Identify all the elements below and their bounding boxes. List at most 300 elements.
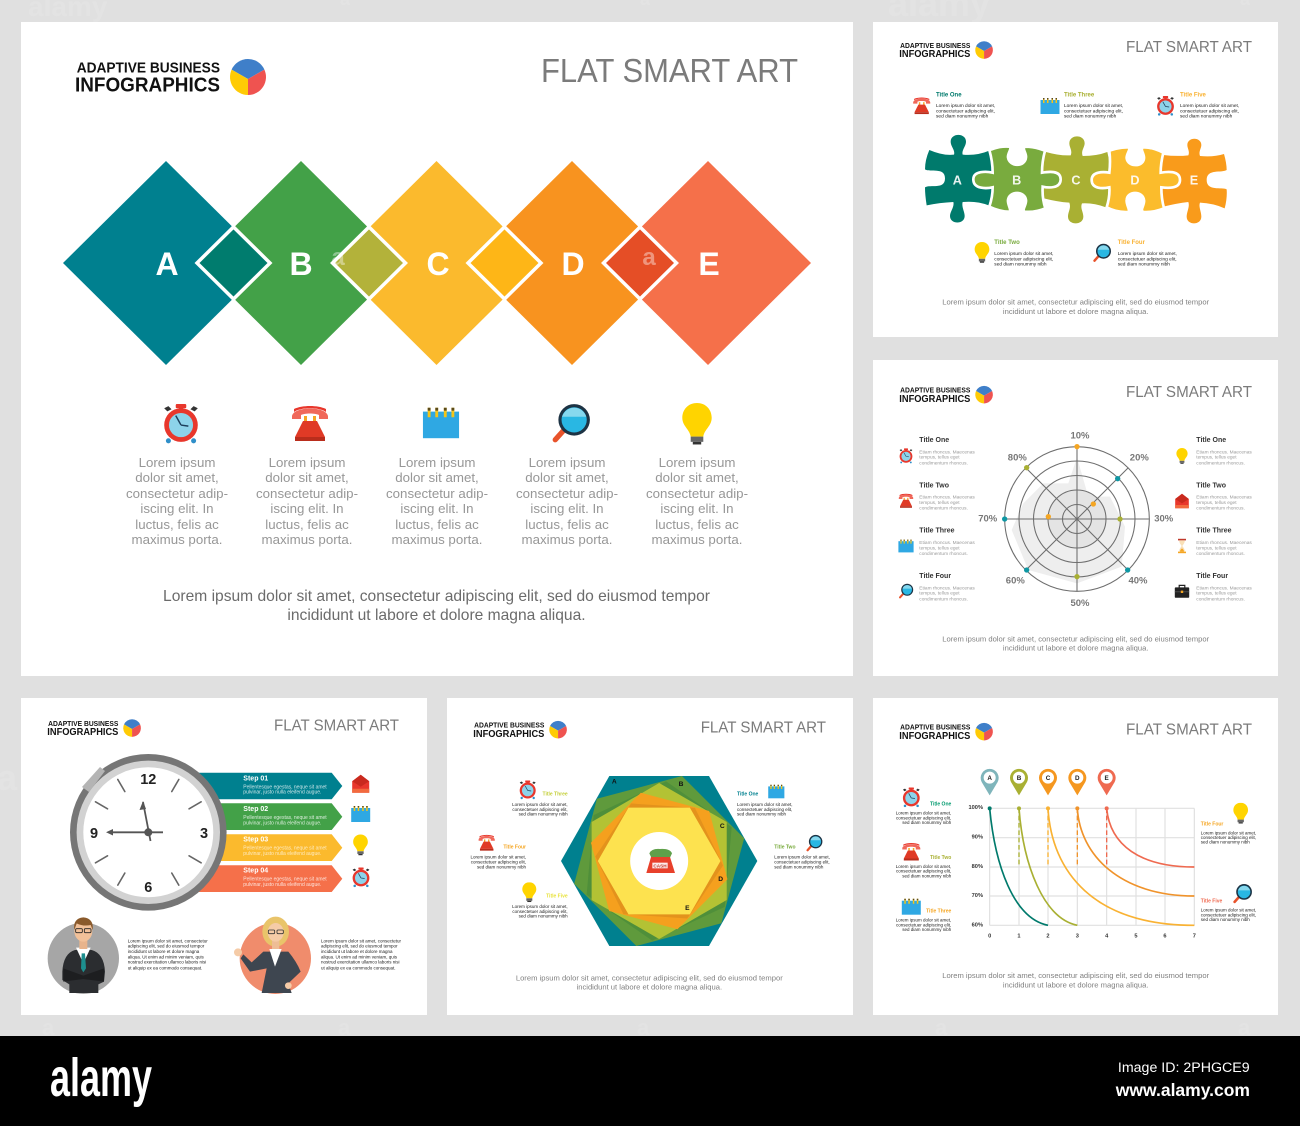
text: title four: consectetuer adipiscing elit,: [471, 859, 526, 864]
nested hexagon diagram: A: [612, 779, 617, 786]
title: FLAT SMART ART: [1126, 384, 1252, 401]
list: left title four: Etiam rhoncus. Maecenas: [919, 585, 975, 591]
list: right title two: [1196, 482, 1252, 512]
column text 1: Lorem ipsum: [139, 455, 215, 470]
radar percent labels: 40%: [1128, 575, 1148, 586]
column text 2: dolor sit amet,: [265, 470, 349, 485]
step 01 arrow: [196, 773, 342, 799]
text: title five: [1180, 92, 1239, 120]
line chart: E: [1105, 775, 1109, 782]
stock photo footer bar: alamy: [50, 1048, 152, 1108]
panel: line chart: [873, 698, 1278, 1015]
line chart: 2: [1046, 933, 1050, 939]
puzzle chain: A: [953, 173, 962, 187]
logo: ADAPTIVE BUSINESS: [48, 719, 119, 728]
line chart: 4: [1105, 933, 1109, 939]
panel: diamonds (main): [21, 22, 853, 676]
text: title three: sed diam nonummy nibh: [519, 812, 568, 817]
text: title three: [896, 909, 952, 932]
list: right title four: [1196, 573, 1252, 602]
nested hexagon diagram: B: [679, 781, 684, 788]
text: man description: aliqua. Ut enim ad minim veniam, quis: [128, 955, 204, 960]
text: title one: consectetuer adipiscing elit,: [936, 108, 995, 114]
diamond row A to E: C: [426, 246, 450, 282]
text: title five: Title Five: [1180, 92, 1207, 98]
text: woman description: incididunt ut labore et dolore magna: [321, 949, 393, 954]
list: right title three: Etiam rhoncus. Maecenas: [1196, 540, 1252, 546]
text: title three: consectetuer adipiscing elit,: [896, 922, 951, 927]
line chart: 90%: [972, 835, 983, 841]
step 02 arrow: pulvinar, justo nulla eleifend augue.: [243, 820, 321, 826]
text: title two: consectetuer adipiscing elit,: [774, 859, 830, 864]
step 03 arrow: Pellentesque egestas, neque sit amet: [243, 846, 327, 852]
step 03 arrow: pulvinar, justo nulla eleifend augue.: [243, 851, 321, 857]
icon: magnifier: [555, 404, 590, 440]
line chart: 1: [1017, 933, 1021, 939]
list: left title two: Etiam rhoncus. Maecenas: [919, 495, 975, 501]
list: left title one: Title One: [919, 437, 949, 444]
column text 1: dolor sit amet,: [135, 470, 219, 485]
list: right title two: condimentum rhoncus.: [1196, 506, 1245, 512]
line chart: 0: [988, 933, 991, 939]
list: right title three: condimentum rhoncus.: [1196, 551, 1245, 557]
icon: light bulb: [682, 403, 712, 444]
line chart: D: [1075, 775, 1080, 782]
logo: ADAPTIVE BUSINESS: [474, 720, 545, 729]
column text 1: luctus, felis ac: [135, 517, 219, 532]
icon: telephone: [479, 835, 495, 851]
list: right title one: condimentum rhoncus.: [1196, 460, 1245, 466]
text: title three: consectetuer adipiscing elit,: [512, 807, 568, 812]
step 02 arrow: Pellentesque egestas, neque sit amet: [243, 815, 327, 821]
nested hexagon diagram: C: [720, 823, 725, 830]
line chart: 100%: [969, 805, 983, 811]
icon: alarm clock: [903, 788, 920, 807]
column text 3: maximus porta.: [392, 532, 482, 547]
text: man description: Lorem ipsum dolor sit amet, consectetur: [128, 938, 208, 943]
icon: calendar: [902, 899, 921, 915]
panel: radar chart: [873, 360, 1278, 676]
list: right title two: tempus, tellus eget: [1196, 500, 1237, 506]
text: title one: [737, 792, 793, 817]
logo: [75, 59, 266, 97]
text: title one: [896, 802, 952, 825]
diamond row A to E: a: [642, 244, 656, 271]
title: FLAT SMART ART: [1126, 39, 1252, 56]
column text 5: maximus porta.: [652, 532, 742, 547]
text: man description: adipiscing elit, sed do eiusmod tempor: [128, 944, 205, 949]
column text 5: dolor sit amet,: [655, 470, 739, 485]
text: woman description: Lorem ipsum dolor sit amet, consectetur: [321, 938, 402, 943]
title: FLAT SMART ART: [541, 52, 798, 89]
list: right title one: [1196, 437, 1252, 466]
text: title five: [1201, 898, 1256, 922]
icon: envelope: [1175, 494, 1189, 508]
list: left title one: Etiam rhoncus. Maecenas: [919, 449, 975, 455]
text: title five: sed diam nonummy nibh: [1180, 114, 1233, 120]
diamond row A to E: [63, 161, 811, 365]
logo: INFOGRAPHICS: [47, 727, 119, 738]
nested hexagon diagram: CASH: [653, 863, 667, 868]
text: title three: Title Three: [1064, 92, 1095, 98]
text: title three: sed diam nonummy nibh: [1064, 114, 1117, 120]
text: title four: [470, 844, 526, 869]
diamond row A to E: a: [331, 244, 345, 271]
panel: clock and steps: [21, 698, 427, 1015]
text: title three: Lorem ipsum dolor sit amet,: [512, 802, 568, 807]
line chart: 70%: [972, 893, 983, 899]
column text 5: iscing elit. In: [660, 501, 734, 516]
footer text: incididunt ut labore et dolore magna aliqua.: [1003, 307, 1148, 316]
text: title two: Title Two: [994, 240, 1020, 246]
icon: alarm clock: [900, 448, 912, 463]
title: FLAT SMART ART: [701, 720, 826, 737]
icon: envelope: [352, 775, 369, 793]
text: title four: Lorem ipsum dolor sit amet,: [1118, 251, 1177, 257]
wall clock: 9: [90, 826, 98, 842]
column text 3: Lorem ipsum: [399, 455, 475, 470]
logo: ADAPTIVE BUSINESS: [900, 722, 971, 731]
text: title two: Lorem ipsum dolor sit amet,: [896, 864, 951, 869]
text: title two: sed diam nonummy nibh: [902, 873, 952, 878]
icon: magnifier: [900, 584, 913, 597]
list: left title two: [919, 482, 975, 512]
list: right title one: Title One: [1196, 437, 1226, 444]
step 01 arrow: Step 01: [243, 775, 268, 782]
step 02 arrow: [196, 803, 342, 830]
column text 2: Lorem ipsum: [269, 455, 345, 470]
line chart: 80%: [972, 864, 983, 870]
list: right title two: Etiam rhoncus. Maecenas: [1196, 495, 1252, 501]
text: title two: consectetuer adipiscing elit,: [896, 869, 951, 874]
panel: puzzle: [873, 22, 1278, 337]
text: title four: [1201, 822, 1256, 845]
text: man description: ut aliquip ex ea commodo consequat.: [128, 965, 202, 970]
stock photo footer bar: Image ID: 2PHGCE9: [1118, 1060, 1250, 1076]
icon: magnifier: [1235, 884, 1252, 902]
stock photo footer bar: www.alamy.com: [1115, 1080, 1250, 1100]
icon: light bulb: [1233, 803, 1248, 824]
line chart: A: [987, 775, 992, 782]
icon: light bulb: [1176, 448, 1188, 464]
icon: telephone: [913, 97, 930, 114]
line chart: 6: [1163, 933, 1167, 939]
text: title four: consectetuer adipiscing elit,: [1201, 835, 1256, 840]
text: title three: Title Three: [542, 792, 568, 798]
line chart: [969, 769, 1196, 939]
diamond row A to E: B: [289, 246, 313, 282]
text: title two: sed diam nonummy nibh: [994, 262, 1047, 268]
column text 4: luctus, felis ac: [525, 517, 609, 532]
footer text: Lorem ipsum dolor sit amet, consectetur adipiscing elit, sed do eiusmod tempor: [942, 297, 1210, 306]
list: left title three: [919, 528, 975, 557]
text: title two: consectetuer adipiscing elit,: [994, 256, 1053, 262]
text: title five: Title Five: [546, 894, 568, 900]
column text 5: luctus, felis ac: [655, 517, 739, 532]
list: right title four: Title Four: [1196, 573, 1228, 580]
icon: telephone: [899, 494, 913, 508]
text: woman description: aliqua. Ut enim ad minim veniam, quis: [321, 955, 398, 960]
wall clock: [70, 754, 227, 911]
line chart: 3: [1076, 933, 1079, 939]
line chart: 60%: [972, 922, 983, 928]
column text 1: consectetur adip-: [126, 486, 228, 501]
text: title four: Title Four: [503, 844, 526, 850]
text: title three: [512, 792, 568, 817]
text: woman description: ut aliquip ex ea commodo consequat.: [321, 965, 396, 970]
text: title five: Lorem ipsum dolor sit amet,: [512, 904, 568, 909]
line chart: C: [1046, 775, 1051, 782]
radar chart: [1002, 444, 1149, 591]
text: title five: consectetuer adipiscing elit,: [1180, 108, 1239, 114]
footer text: incididunt ut labore et dolore magna aliqua.: [1003, 644, 1148, 653]
column text 2: luctus, felis ac: [265, 517, 349, 532]
icon: calendar: [423, 408, 459, 438]
text: title five: Lorem ipsum dolor sit amet,: [1180, 103, 1239, 109]
list: left title three: Title Three: [919, 528, 955, 535]
icon: calendar: [898, 540, 914, 552]
text: title four: Title Four: [1118, 240, 1146, 246]
icon: briefcase: [1175, 585, 1189, 598]
step 04 arrow: Step 04: [243, 867, 268, 874]
text: title one: Title One: [737, 792, 759, 798]
watermark fragments: a: [637, 1015, 650, 1040]
footer text: incididunt ut labore et dolore magna aliqua.: [1003, 980, 1148, 989]
icon: calendar: [351, 806, 370, 822]
icon: alarm clock: [353, 868, 369, 887]
nested hexagon diagram: [554, 764, 764, 958]
list: left title four: Title Four: [919, 573, 951, 580]
radar percent labels: [978, 430, 1174, 609]
wall clock: 6: [144, 880, 152, 896]
icon: alarm clock: [164, 404, 198, 443]
nested hexagon diagram: D: [718, 876, 723, 883]
list: left title two: condimentum rhoncus.: [919, 506, 968, 512]
column text 4: dolor sit amet,: [525, 470, 609, 485]
column text 5: consectetur adip-: [646, 486, 748, 501]
text: title two: [994, 240, 1053, 268]
logo: ADAPTIVE BUSINESS: [77, 61, 220, 77]
line chart: B: [1017, 775, 1022, 782]
icon: hourglass: [1178, 539, 1186, 553]
puzzle chain: C: [1071, 173, 1081, 187]
text: title four: sed diam nonummy nibh: [1118, 262, 1170, 268]
radar percent labels: 10%: [1070, 430, 1090, 441]
step 04 arrow: pulvinar, justo nulla eleifend augue.: [243, 882, 321, 888]
step 01 arrow: Pellentesque egestas, neque sit amet: [243, 784, 327, 790]
text: title three: consectetuer adipiscing elit,: [1064, 108, 1123, 114]
list: left title one: tempus, tellus eget: [919, 455, 960, 461]
text: title four: [1118, 240, 1177, 268]
diamond row A to E: E: [698, 246, 720, 282]
icon: magnifier: [1094, 244, 1111, 261]
logo: INFOGRAPHICS: [899, 394, 971, 405]
person: man: [48, 917, 119, 994]
icon: light bulb: [522, 882, 536, 902]
title: FLAT SMART ART: [274, 718, 399, 735]
step 03 arrow: [196, 834, 342, 861]
text: title three: Title Three: [926, 909, 952, 915]
text: title four: sed diam nonummy nibh: [477, 864, 526, 869]
list: left title one: [919, 437, 975, 466]
text: title five: sed diam nonummy nibh: [1201, 917, 1250, 922]
text: title one: Lorem ipsum dolor sit amet,: [936, 103, 995, 109]
step 02 arrow: Step 02: [243, 806, 268, 813]
text: title three: [1064, 92, 1123, 120]
text: title five: consectetuer adipiscing elit,: [512, 909, 568, 914]
logo: INFOGRAPHICS: [75, 74, 220, 97]
icon: alarm clock: [1157, 96, 1174, 116]
logo: [473, 720, 567, 740]
person: woman: [234, 917, 311, 994]
column text 4: iscing elit. In: [530, 501, 604, 516]
column text 4: consectetur adip-: [516, 486, 618, 501]
nested hexagon diagram: E: [685, 905, 690, 912]
text: title two: sed diam nonummy nibh: [774, 864, 824, 869]
wall clock: 12: [140, 772, 156, 788]
text: title one: sed diam nonummy nibh: [902, 820, 952, 825]
column text 3: consectetur adip-: [386, 486, 488, 501]
diamond row A to E: A: [155, 246, 179, 282]
footer text: incididunt ut labore et dolore magna aliqua.: [577, 983, 722, 992]
wall clock: 3: [200, 826, 208, 842]
icon: telephone: [292, 406, 328, 441]
text: title one: consectetuer adipiscing elit,: [737, 807, 792, 812]
logo: [899, 41, 993, 60]
text: man description: nostrud exercitation ullamco laboris nisi: [128, 960, 206, 965]
icon: light bulb: [975, 242, 989, 263]
text: title four: sed diam nonummy nibh: [1201, 840, 1250, 845]
column text 2: iscing elit. In: [270, 501, 344, 516]
text: title five: consectetuer adipiscing elit,: [1201, 912, 1256, 917]
list: right title three: Title Three: [1196, 528, 1232, 535]
text: title one: consectetuer adipiscing elit,: [896, 815, 951, 820]
text: title one: Lorem ipsum dolor sit amet,: [896, 810, 951, 815]
icon: light bulb: [353, 834, 368, 855]
footer text: Lorem ipsum dolor sit amet, consectetur adipiscing elit, sed do eiusmod tempor: [163, 588, 710, 605]
list: right title one: Etiam rhoncus. Maecenas: [1196, 449, 1252, 455]
logo: [47, 719, 141, 738]
list: left title three: tempus, tellus eget: [919, 545, 960, 551]
text: title one: Lorem ipsum dolor sit amet,: [737, 802, 793, 807]
list: right title three: tempus, tellus eget: [1196, 545, 1237, 551]
radar percent labels: 60%: [1006, 575, 1025, 586]
text: title two: [896, 855, 952, 878]
list: right title four: tempus, tellus eget: [1196, 591, 1237, 597]
list: left title four: condimentum rhoncus.: [919, 596, 968, 602]
text: title four: Lorem ipsum dolor sit amet,: [1201, 830, 1256, 835]
icon: telephone: [902, 843, 920, 860]
step 04 arrow: [196, 865, 342, 892]
watermark fragments: a: [42, 1015, 55, 1040]
panel: hexagon: [447, 698, 853, 1015]
text: title five: Title Five: [1201, 898, 1223, 904]
text: title two: Lorem ipsum dolor sit amet,: [774, 855, 830, 860]
column text 3: dolor sit amet,: [395, 470, 479, 485]
icon: alarm clock: [520, 780, 536, 799]
list: right title four: condimentum rhoncus.: [1196, 596, 1245, 602]
list: left title four: [919, 573, 975, 602]
list: right title four: Etiam rhoncus. Maecenas: [1196, 585, 1252, 591]
radar percent labels: 20%: [1130, 453, 1149, 464]
logo: ADAPTIVE BUSINESS: [900, 385, 971, 394]
column text 2: maximus porta.: [262, 532, 352, 547]
column text 2: consectetur adip-: [256, 486, 358, 501]
logo: ADAPTIVE BUSINESS: [900, 41, 971, 50]
icon: magnifier: [808, 835, 822, 850]
line chart: 7: [1193, 933, 1196, 939]
step 04 arrow: Pellentesque egestas, neque sit amet: [243, 876, 327, 882]
text: title one: sed diam nonummy nibh: [737, 812, 787, 817]
text: title four: consectetuer adipiscing elit,: [1118, 256, 1177, 262]
logo: INFOGRAPHICS: [899, 49, 971, 60]
icon: calendar: [768, 785, 784, 798]
footer text: Lorem ipsum dolor sit amet, consectetur adipiscing elit, sed do eiusmod tempor: [516, 973, 783, 982]
radar percent labels: 70%: [978, 514, 998, 525]
step 01 arrow: pulvinar, justo nulla eleifend augue.: [243, 790, 321, 796]
radar percent labels: 80%: [1008, 453, 1027, 464]
text: title three: Lorem ipsum dolor sit amet,: [1064, 103, 1123, 109]
diamond row A to E: D: [561, 246, 585, 282]
puzzle chain: E: [1190, 173, 1198, 187]
list: right title one: tempus, tellus eget: [1196, 455, 1237, 461]
list: right title three: [1196, 528, 1252, 557]
text: title four: Title Four: [1201, 822, 1223, 828]
line chart: 5: [1134, 933, 1138, 939]
logo: [899, 385, 993, 405]
text: title two: Lorem ipsum dolor sit amet,: [994, 251, 1053, 257]
list: right title two: Title Two: [1196, 482, 1226, 489]
logo: INFOGRAPHICS: [473, 729, 545, 740]
icon: calendar: [1040, 98, 1060, 114]
text: title three: sed diam nonummy nibh: [902, 927, 952, 932]
list: left title three: Etiam rhoncus. Maecenas: [919, 540, 975, 546]
stock photo footer bar: [0, 1036, 1300, 1126]
text: title two: [774, 844, 830, 869]
footer text: Lorem ipsum dolor sit amet, consectetur adipiscing elit, sed do eiusmod tempor: [942, 971, 1210, 980]
column text 3: iscing elit. In: [400, 501, 474, 516]
text: title five: [512, 894, 568, 919]
radar percent labels: 30%: [1154, 514, 1174, 525]
radar percent labels: 50%: [1070, 598, 1090, 609]
watermark fragments: a: [338, 1015, 351, 1040]
text: title one: Title One: [936, 92, 962, 98]
list: left title four: tempus, tellus eget: [919, 591, 960, 597]
text: title one: [936, 92, 995, 120]
logo: INFOGRAPHICS: [899, 731, 971, 742]
list: left title one: condimentum rhoncus.: [919, 460, 968, 466]
logo: [899, 722, 993, 742]
text: title five: sed diam nonummy nibh: [519, 914, 568, 919]
step 03 arrow: Step 03: [243, 837, 268, 844]
column text 3: luctus, felis ac: [395, 517, 479, 532]
text: title two: Title Two: [930, 855, 951, 861]
text: title three: Lorem ipsum dolor sit amet,: [896, 918, 951, 923]
list: left title two: tempus, tellus eget: [919, 500, 960, 506]
column text 1: iscing elit. In: [140, 501, 214, 516]
text: title two: Title Two: [774, 844, 796, 850]
watermark fragments: a: [935, 1015, 948, 1040]
puzzle chain: D: [1130, 173, 1140, 187]
footer text: incididunt ut labore et dolore magna aliqua.: [287, 607, 586, 624]
text: title one: sed diam nonummy nibh: [936, 114, 989, 120]
text: man description: incididunt ut labore et dolore magna: [128, 949, 200, 954]
title: FLAT SMART ART: [1126, 721, 1252, 738]
text: woman description: nostrud exercitation ullamco laboris nisi: [321, 960, 400, 965]
text: title five: Lorem ipsum dolor sit amet,: [1201, 908, 1256, 913]
text: title one: Title One: [930, 802, 952, 808]
column text 4: maximus porta.: [522, 532, 612, 547]
